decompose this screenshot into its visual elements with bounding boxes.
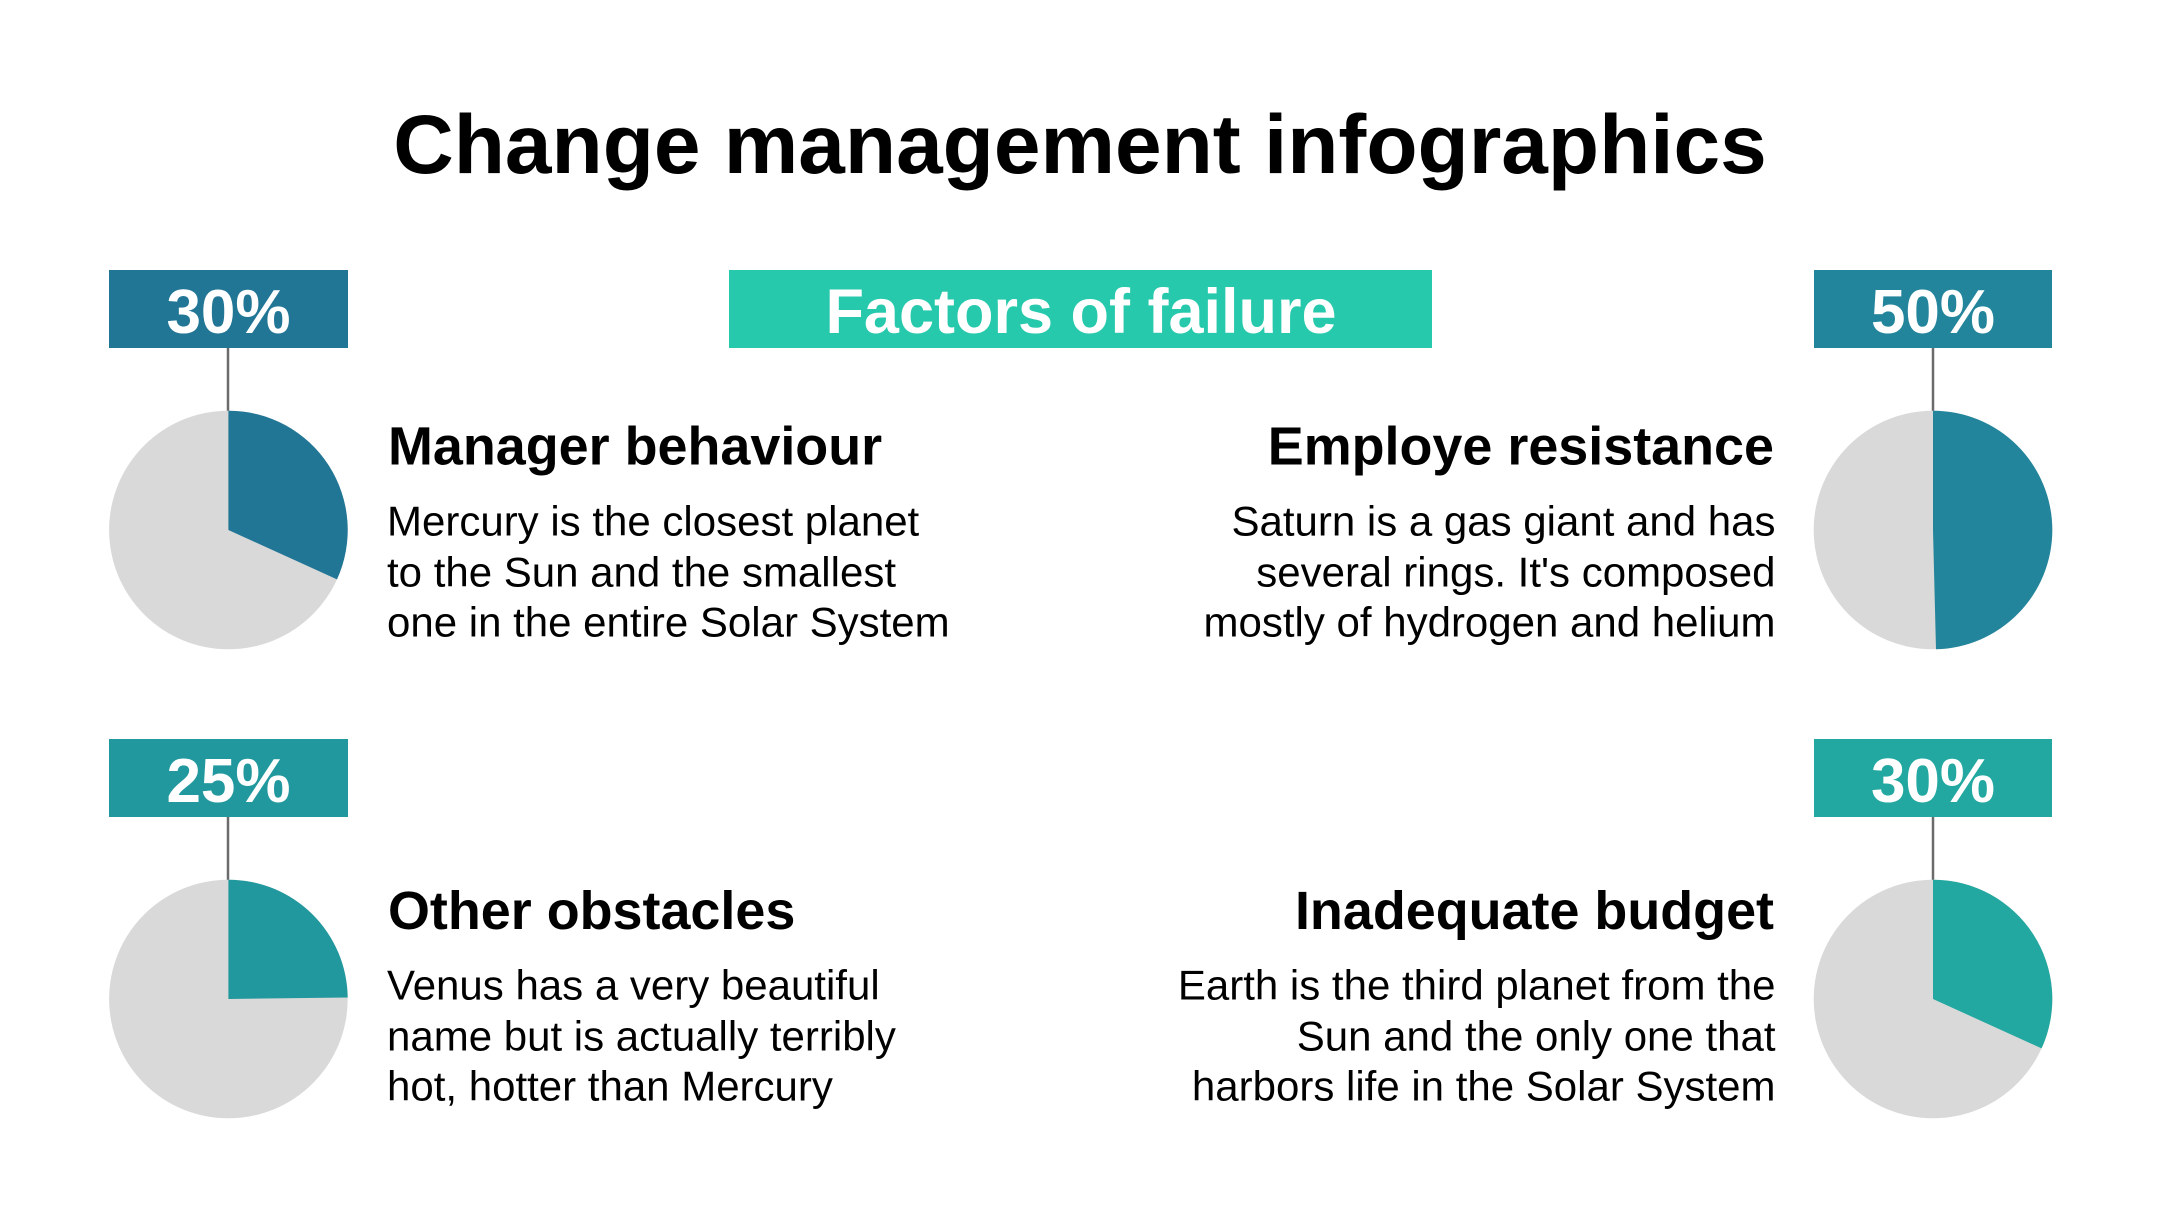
title: Change management infographics: [393, 97, 1767, 191]
pie chart: 30%: [109, 348, 348, 649]
description: Mercury is the closest planet: [387, 498, 920, 544]
heading: Other obstacles: [388, 881, 795, 941]
description: several rings. It's composed: [1256, 548, 1776, 596]
description: Earth is the third planet from the: [1178, 962, 1776, 1008]
description: Sun and the only one that: [1297, 1012, 1776, 1060]
pie chart: 25%: [109, 817, 348, 1118]
pie chart: 30%: [1814, 817, 2052, 1118]
description: hot, hotter than Mercury: [387, 1062, 833, 1110]
percentage label: 30%: [109, 270, 348, 348]
percentage label: 30%: 30%: [166, 278, 291, 347]
description: harbors life in the Solar System: [1192, 1062, 1776, 1110]
heading: Employe resistance: [1268, 416, 1774, 476]
banner: factors of failure: [729, 270, 1432, 348]
pie chart: 50%: [1814, 348, 2052, 649]
percentage label: 25%: [109, 739, 348, 817]
percentage label: 50%: [1814, 270, 2052, 348]
description: one in the entire Solar System: [387, 598, 950, 646]
panel: other obstacles: [109, 739, 896, 1118]
description: mostly of hydrogen and helium: [1204, 598, 1776, 646]
banner: factors of failure: Factors of failure: [825, 277, 1337, 347]
description: to the Sun and the smallest: [387, 548, 896, 596]
percentage label: 50%: 50%: [1871, 278, 1995, 347]
percentage label: 30%: 30%: [1871, 747, 1995, 816]
heading: Inadequate budget: [1295, 881, 1774, 941]
description: name but is actually terribly: [387, 1012, 896, 1060]
description: Venus has a very beautiful: [387, 962, 880, 1008]
heading: Manager behaviour: [388, 416, 882, 476]
panel: manager behaviour: [109, 270, 950, 649]
panel: employe resistance: [1204, 270, 2052, 649]
percentage label: 30%: [1814, 739, 2052, 817]
panel: inadequate budget: [1178, 739, 2052, 1118]
description: Saturn is a gas giant and has: [1231, 498, 1776, 544]
percentage label: 25%: 25%: [166, 747, 291, 816]
